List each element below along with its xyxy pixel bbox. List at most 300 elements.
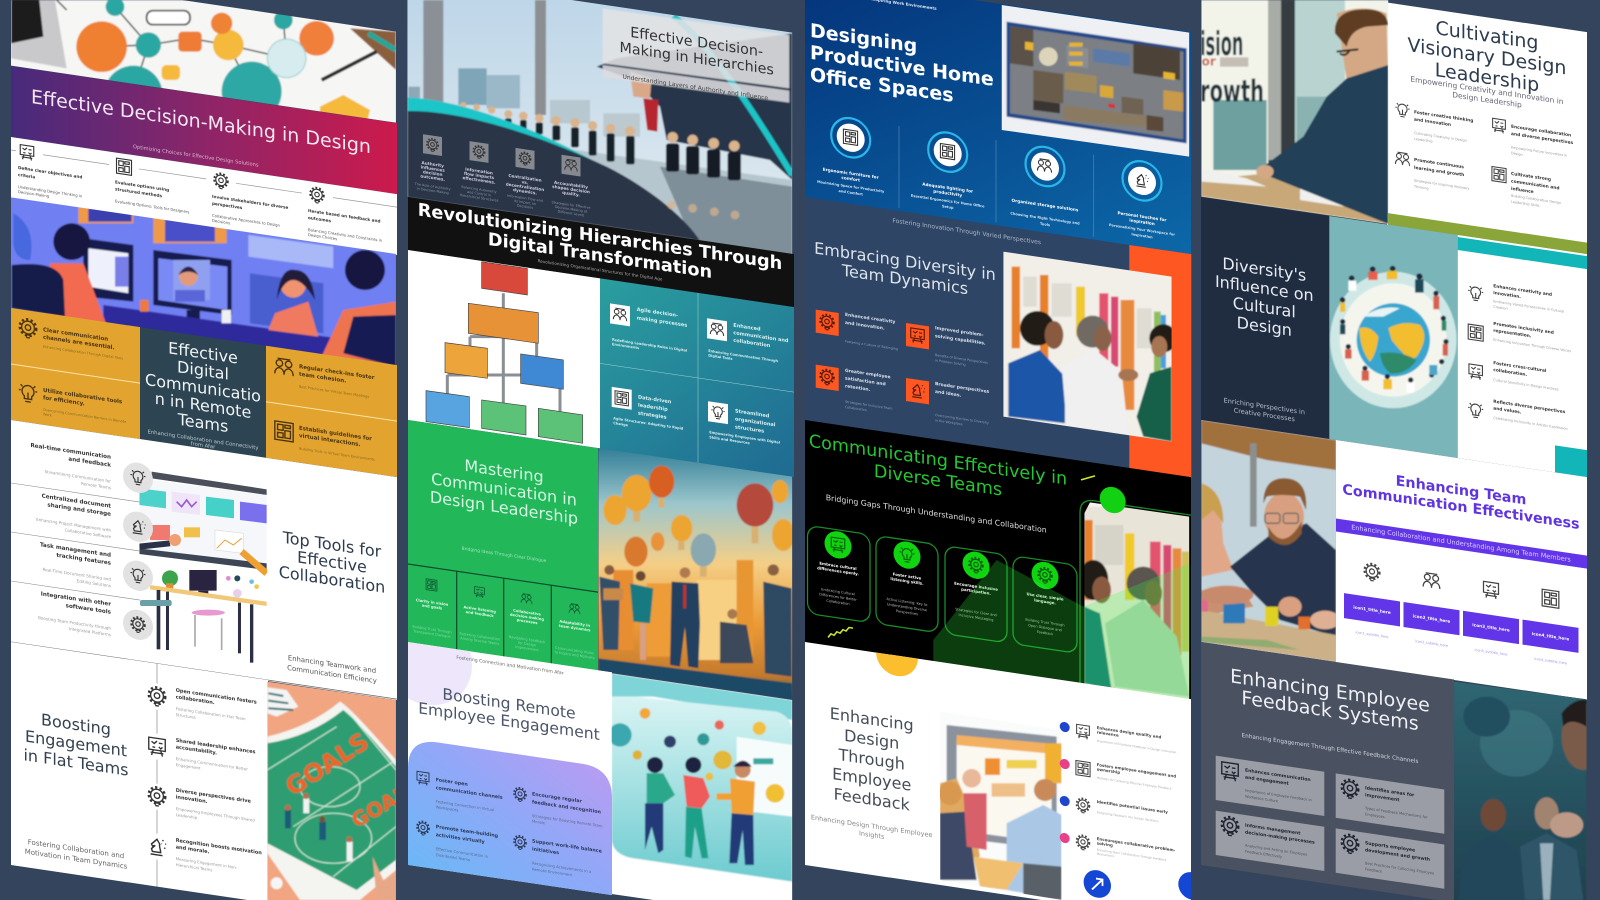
- item: reflects perspectives: Reflects diverse perspectives: [1493, 400, 1565, 415]
- item: streamlined structures: [708, 401, 780, 450]
- item: satisfaction: Strategies for Inclusive Team: [845, 400, 892, 411]
- slide content: flat teams: [23, 644, 262, 900]
- card: development and growth: [1336, 828, 1444, 889]
- item: collaborative tools: for efficiency.: [43, 395, 85, 407]
- card: development and growth: Feedback: [1365, 867, 1383, 874]
- card: development and growth: development and growth: [1365, 847, 1430, 863]
- icon: ring and plant: [1122, 158, 1162, 203]
- item: open communication: [146, 682, 257, 729]
- card: active listening: listening skills.: [890, 576, 924, 586]
- heading: Design: [844, 726, 899, 753]
- heading: Employee: [832, 764, 911, 795]
- item: open communication: Fostering Collaboration in Flat Team: [176, 706, 246, 721]
- card: embrace differences: Embrace cultural: [819, 561, 857, 571]
- item: authority: in Decision-Making: [417, 187, 449, 195]
- slide content: employee feedback: [811, 621, 1206, 900]
- item: task management: Real-Time Document Sharing and: [43, 567, 111, 582]
- slide content: digital transformation: [418, 200, 794, 477]
- item: problem solving: in Problem-Solving: [935, 358, 966, 367]
- icon: blue circle at edge: [1178, 870, 1206, 900]
- heading: Top Tools for: [283, 528, 381, 561]
- icon: board: [906, 323, 929, 349]
- item: check-ins: team cohesion.: [299, 372, 346, 385]
- item: data-driven: Agile Structures: Adapting to Rapid: [613, 416, 683, 431]
- item: satisfaction: retention.: [845, 383, 871, 393]
- image: team at wall: [1078, 500, 1193, 700]
- item: shared leadership: [146, 732, 255, 779]
- decoration: dash: [1081, 474, 1095, 482]
- item: adequate lighting: [911, 127, 985, 215]
- card: areas for improvement: Types of Feedback Mechanisms for: [1365, 806, 1427, 820]
- item: open communication: collaboration.: [176, 694, 215, 706]
- heading: Designing: [810, 19, 917, 58]
- image: blurred executives: [1453, 680, 1600, 900]
- icon: gears: [1222, 816, 1238, 837]
- item: icon 1: icon1_title_here: [1353, 605, 1391, 615]
- item: authority: influences: [421, 164, 445, 173]
- heading: Design Leadership: [430, 487, 578, 528]
- item: team building: Effective Communication in: [436, 846, 488, 859]
- item: recognition: Recognition boosts motivation: [176, 838, 262, 856]
- item: open channels: Workspaces: [436, 804, 458, 813]
- slide background: [1336, 440, 1587, 700]
- item: creativity: Fostering a Culture of Belonging: [845, 339, 898, 351]
- item: streamlined structures: Empowering Employees with Digital: [709, 430, 780, 445]
- item: define objectives: criteria: [18, 172, 35, 180]
- slide content: team communication: [1336, 465, 1587, 669]
- slide: Enhancing Employee Feedback Systems: [1201, 642, 1600, 900]
- item: check-ins: Regular check-ins foster: [299, 364, 374, 381]
- icon: gears: [514, 835, 526, 850]
- item: icon 1: icon1_subtitle_here: [1356, 630, 1388, 639]
- item: document sharing: sharing and storage: [47, 502, 111, 518]
- image: lightbulb balloons and leaders: [597, 447, 797, 707]
- subheading: Enhancing Engagement Through Effective Feedback Channels: [1242, 733, 1418, 765]
- slide background: [1387, 3, 1587, 255]
- item: design quality: Importance of Employee Feedback in Design Innovation: [1097, 739, 1176, 754]
- item: iterate: Design Choices: [308, 232, 337, 241]
- panel: center title: [140, 327, 266, 458]
- item: agile decision-making: [610, 303, 687, 357]
- icon: gear on green circle: [962, 550, 990, 581]
- icon: gear bulb: [417, 821, 429, 836]
- image: executive placing figures: [400, 0, 800, 263]
- card: clear language: Feedback: [1037, 630, 1054, 636]
- slide content: diverse teams: [808, 431, 1191, 700]
- image: team at planning wall: [1000, 247, 1177, 447]
- card: development and growth: Best Practices for Collecting Employee: [1365, 861, 1434, 876]
- image: video call illustration: [0, 193, 400, 370]
- item: collaboration: Encourage collaboration: [1511, 125, 1571, 139]
- item: collaborative decisions: for Design: [518, 641, 536, 647]
- slide: Effective Decision-Making in Design: [0, 0, 400, 255]
- item: storage: [1010, 142, 1080, 232]
- heading: Productive Home: [810, 41, 994, 91]
- item: clarity: Transparent Dialogue: [412, 629, 451, 639]
- item: team building: activities virtually: [436, 832, 485, 845]
- card: inclusive participation: participation.: [961, 587, 991, 596]
- card: communication and engagement: Workplace Culture: [1245, 795, 1279, 803]
- icon: board: [417, 771, 429, 786]
- icon: cloche: [1492, 166, 1506, 183]
- slide: Enhancing Design Through Employee Feedback: [805, 621, 1206, 900]
- slide: Revolutionizing Hierarchies Through Digital Transformation: [408, 197, 794, 477]
- slide background: [1201, 642, 1454, 900]
- item: enhanced communication: Enhancing Communication Through: [708, 349, 778, 363]
- subheading: Creative Processes: [1234, 406, 1295, 423]
- icon: building: [1468, 324, 1483, 341]
- slide content: hierarchies: [414, 0, 774, 246]
- item: collaboration: Empowering Future Innovators in: [1511, 145, 1567, 158]
- item: creativity: and innovation.: [845, 320, 885, 332]
- item: work-life balance: Recognizing Achievements in a: [532, 860, 591, 874]
- heading: Enhancing: [830, 704, 914, 735]
- item: document sharing: Enhancing Project Management with: [36, 517, 111, 533]
- item: centralization: Information Flow and: [507, 194, 543, 203]
- icon: bulb: [708, 401, 728, 424]
- icon: blue arrow button: [1084, 868, 1111, 900]
- heading: Mastering: [464, 456, 544, 486]
- item: shared leadership: Enhancing Communication for Better: [176, 756, 248, 772]
- icon: webcam: [19, 384, 37, 403]
- image: goals tablet: GOAL!: [347, 777, 420, 833]
- icon: brain hand: [1468, 286, 1483, 302]
- item: icon 4: icon4_title_here: [1532, 631, 1569, 642]
- subheading: Fostering Innovation Through Varied Perspectives: [892, 217, 1041, 246]
- item: communication and influence: communication and: [1511, 178, 1560, 192]
- item: listening: and feedback: [466, 610, 494, 618]
- item: accountability: shapes decision: [552, 184, 590, 194]
- item: listening: Active listening: [463, 605, 496, 614]
- item: cross-cultural: Fosters cross-cultural: [1493, 361, 1546, 374]
- chart: org chart illustration: [426, 262, 583, 443]
- item: centralization: Decisions: [517, 204, 533, 210]
- icon: gears: [1342, 779, 1358, 799]
- title band: [11, 66, 397, 194]
- card: active listening: Understanding Diverse: [887, 602, 927, 612]
- item: creativity: Enhances creativity and: [1493, 284, 1552, 298]
- icon: network: [20, 318, 36, 339]
- item: work-life balance: initiatives: [532, 846, 559, 856]
- card: embrace differences: [808, 525, 870, 623]
- card: embrace differences: Embracing Cultural: [821, 587, 855, 596]
- item: define objectives: [18, 144, 83, 204]
- item: communication and influence: influence: [1511, 186, 1534, 195]
- item: team building: Distributed Teams: [436, 852, 470, 862]
- item: listening: Among Diverse Teams: [460, 636, 499, 646]
- heading: Effective: [297, 547, 367, 577]
- slide background: [11, 642, 268, 900]
- icon: gear bulb: [131, 616, 145, 633]
- panel: green: [408, 420, 598, 671]
- item: streamlined structures: Streamlined: [735, 408, 769, 419]
- card: embrace differences: Collaboration: [826, 599, 850, 606]
- item: diverse perspectives: Empowering Employees Through Shared: [176, 806, 255, 823]
- item: accountability: [552, 153, 590, 218]
- item: creativity: [816, 308, 898, 351]
- card: active listening: Perspectives: [896, 609, 918, 616]
- icon: gear: [470, 141, 488, 163]
- card: clear language: language.: [1034, 597, 1056, 606]
- heading: Communicating Effectively in: [809, 432, 1067, 490]
- icon: gear: [149, 786, 165, 807]
- item: reflects perspectives: [1468, 395, 1568, 431]
- item: shared leadership: Shared leadership enhances: [176, 738, 255, 755]
- card: communication and engagement: Importance of Employee Feedback in: [1245, 789, 1312, 802]
- card: clear language: Use clear, simple: [1027, 591, 1063, 602]
- slide background: [805, 197, 1191, 478]
- item: broader perspectives: and ideas.: [935, 389, 961, 399]
- item: data-driven: [612, 387, 684, 436]
- item: creativity: [1468, 280, 1564, 319]
- icon: bulb: [130, 568, 146, 584]
- subheading: Fostering Connection and Motivation from Afar: [456, 655, 564, 677]
- item: adaptability: Communicating Vision: [555, 646, 594, 656]
- heading: Cultural: [1233, 293, 1296, 322]
- icon: knight: [133, 520, 146, 535]
- item: problem solving: Benefits of Diverse Perspectives: [935, 353, 988, 365]
- card: active listening: [876, 536, 938, 633]
- item: satisfaction: satisfaction and: [845, 376, 886, 388]
- item: satisfaction: Collaboration: [845, 405, 867, 412]
- image: watercolor team at board: [938, 710, 1063, 900]
- heading: Design: [1237, 313, 1292, 340]
- item: employee engagement: Methods for Collecting Effective Employee Feedback: [1097, 776, 1172, 791]
- heading: Making in Hierarchies: [620, 40, 774, 79]
- item: enhanced communication: [707, 318, 789, 369]
- slide: Cultivating Visionary Design Leadership: [1200, 0, 1587, 255]
- item: reflects perspectives: and values.: [1493, 405, 1522, 416]
- subheading: from Afar: [191, 441, 216, 451]
- slide content: feedback systems: [1216, 662, 1444, 889]
- icon: gear: [1077, 798, 1089, 814]
- heading: Leadership: [1435, 58, 1539, 96]
- item: ergonomic furniture: and Comfort: [839, 189, 863, 197]
- icon: gears: [516, 148, 534, 170]
- icon: gear: [816, 310, 839, 336]
- icon: tools: [1469, 364, 1482, 380]
- item: involve stakeholders: Decisions: [212, 218, 230, 225]
- icon: knight: [906, 378, 929, 404]
- subheading: Revolutionizing Organizational Structures for the Digital Age: [538, 258, 663, 282]
- item: adaptability: [555, 601, 595, 660]
- heading: Office Spaces: [810, 63, 954, 107]
- item: enhanced communication: collaboration: [733, 338, 771, 349]
- item: creative thinking: [1395, 103, 1473, 150]
- item: authority: The Role of Authority: [415, 182, 451, 191]
- subheading: Design Leadership: [1452, 90, 1522, 109]
- item: icon 2: icon2_subtitle_here: [1415, 639, 1448, 648]
- item: listening: [459, 584, 500, 646]
- item: agile decision-making: Environments: [612, 342, 639, 350]
- item: creative thinking: and innovation: [1414, 117, 1451, 128]
- item: work-life balance: Remote Environment: [532, 866, 573, 877]
- image: goals tablet: [263, 677, 420, 900]
- item: collaborative problem solving: Mechanisms: [1097, 852, 1115, 858]
- item: open communication: Open communication fosters: [176, 688, 257, 706]
- item: recognition: Measuring Engagement in Non-: [176, 856, 237, 870]
- item: regular feedback: Encourage regular: [532, 792, 582, 805]
- card: communication and engagement: and engagement: [1245, 775, 1290, 787]
- item: accountability: Decision-Making at: [555, 205, 588, 214]
- card: communication and engagement: Enhances communication: [1245, 769, 1311, 783]
- item: creative thinking: Cultivating Creativity in Design: [1414, 131, 1467, 143]
- card: clear language: [1013, 556, 1077, 653]
- item: check-ins: [275, 358, 375, 400]
- heading: Enhancing Team: [1396, 473, 1526, 509]
- card: active listening: Foster active: [893, 571, 921, 581]
- heading: Revolutionizing Hierarchies Through: [418, 200, 782, 274]
- item: information flow: [460, 140, 499, 203]
- heading: in Flat Teams: [23, 745, 129, 780]
- card: areas for improvement: [1336, 773, 1444, 834]
- icon: ring and tools: [1026, 144, 1064, 189]
- item: agile decision-making: making processes: [637, 315, 687, 329]
- item: continuous learning: [1395, 152, 1469, 197]
- item: real-time communication: Real-time communication: [31, 443, 111, 461]
- image: floor plan: [1000, 0, 1200, 160]
- heading: Communication in: [431, 469, 577, 510]
- slide: Mastering Communication in Design Leadership: [408, 420, 797, 707]
- card: management decisions: Analyzing and Acting on Employee: [1245, 844, 1307, 857]
- item: iterate: Balancing Creativity and Constraints in: [308, 227, 382, 243]
- item: ergonomic furniture: comfort: [841, 175, 860, 183]
- item: streamlined structures: organizational: [735, 416, 776, 428]
- decoration: green dot: [1100, 485, 1126, 515]
- item: regular feedback: Morale: [532, 818, 546, 825]
- item: problem solving: [906, 321, 988, 370]
- item: continuous learning: Promote continuous: [1414, 158, 1464, 170]
- heading: Effective: [168, 338, 238, 368]
- image: dashboard and desk: [139, 472, 267, 663]
- item: guidelines: [275, 421, 375, 462]
- item: clear channels: [20, 318, 123, 361]
- item: icon 2: icon2_title_here: [1413, 613, 1450, 624]
- item: collaborative decisions: Navigating Feedback: [509, 635, 545, 644]
- item: design quality: [1060, 720, 1176, 754]
- item: involve stakeholders: Involve stakeholders for diverse: [212, 194, 288, 210]
- item: integration: Integration with other: [41, 591, 111, 608]
- image: team handshake illustration: [608, 670, 797, 900]
- band: [1336, 518, 1587, 569]
- heading: Digital Transformation: [488, 229, 712, 283]
- item: icon 2: [1404, 569, 1460, 650]
- item: regular feedback: feedback and recognition: [532, 799, 601, 816]
- item: storage: Tools: [1040, 222, 1050, 227]
- item: authority: outcomes.: [420, 173, 445, 182]
- item: potential issues: Integrating Feedback into Design Iterations: [1097, 810, 1159, 823]
- item: accountability: Different Levels: [558, 210, 585, 218]
- subheading: Enriching Perspectives in: [1224, 396, 1305, 416]
- heading: Digital: [177, 357, 229, 384]
- icon: gear: [423, 134, 442, 156]
- item: icon 3: icon3_subtitle_here: [1475, 648, 1507, 657]
- item: guidelines: virtual interactions.: [299, 433, 361, 448]
- item: clarity: and goals: [422, 604, 443, 611]
- item: authority: decision: [423, 169, 442, 177]
- item: document sharing: Collaborative Software: [65, 527, 111, 539]
- item: personal touches: Inspiration: [1131, 232, 1153, 240]
- item: adequate lighting: Adequate lighting for: [922, 181, 973, 194]
- item: shared leadership: Engagement: [176, 762, 201, 771]
- icon: ring and gear: [831, 115, 870, 160]
- item: collaborative tools: Utilize collaborative tools: [43, 388, 122, 405]
- item: open channels: Foster open: [436, 778, 468, 788]
- item: evaluate options: structured methods: [115, 186, 162, 198]
- icon: grid: [116, 158, 132, 175]
- item: information flow: Balancing Autonomy: [461, 185, 497, 194]
- item: clear channels: Enhancing Collaboration Through Digital Tools: [43, 345, 123, 361]
- heading: Boosting Remote: [442, 684, 576, 723]
- item: diverse perspectives: Leadership: [176, 812, 198, 820]
- item: reflects perspectives: Celebrating Inclusivity in Artistic Expression: [1493, 416, 1568, 431]
- item: collaboration: and diverse perspectives: [1511, 131, 1573, 146]
- panel: right orange: [266, 346, 397, 477]
- item: check-ins: Best Practices for Virtual Team Meetings: [299, 385, 369, 399]
- item: potential issues: Identifies potential issues early: [1097, 799, 1168, 815]
- item: task management: [40, 542, 153, 595]
- item: iterate: Iterate based on feedback and: [308, 208, 381, 224]
- icon: team: [562, 155, 580, 177]
- icon: handshake: [1395, 152, 1410, 166]
- item: information flow: Information: [465, 166, 493, 176]
- item: ergonomic furniture: [817, 113, 885, 200]
- item: problem solving: Improved problem-: [935, 326, 983, 338]
- item: open channels: communication channels: [436, 785, 503, 801]
- subheading: Optimizing Choices for Effective Design Solutions: [133, 144, 259, 169]
- subheading: Enhancing Design Through Employee: [811, 813, 932, 839]
- slide background: [11, 420, 397, 700]
- item: streamlined structures: Skills and Resources: [709, 435, 750, 445]
- item: communication and influence: [1492, 166, 1561, 211]
- heading: Collaboration: [279, 562, 385, 597]
- item: cross-cultural: Cultural Sensitivity in Design Practices: [1493, 378, 1559, 392]
- heading: Embracing Diversity in: [814, 238, 996, 284]
- icon: team: [521, 593, 532, 604]
- item: adequate lighting: Essential Ergonomics for Home Office: [911, 194, 984, 209]
- item: accountability: Accountability: [554, 180, 588, 190]
- item: agile decision-making: Redefining Leadership Roles in Digital: [612, 338, 687, 353]
- item: iterate: [308, 186, 382, 242]
- item: collaborative problem solving: Enhancing Team Collaboration through Feedback: [1097, 848, 1166, 862]
- item: accountability: quality.: [562, 190, 580, 197]
- item: broader perspectives: Broader perspectives: [935, 382, 989, 395]
- icon: grid: [426, 579, 437, 591]
- heading: n in Remote: [155, 389, 251, 422]
- item: recognition: Hierarchical Teams: [176, 862, 212, 872]
- item: integration: software tools: [66, 603, 112, 616]
- heading: Engagement: [25, 727, 127, 761]
- item: collaborative decisions: Collaborative: [513, 609, 541, 617]
- icon: gears: [514, 787, 526, 802]
- item: continuous learning: Strategies for Inspiring Visionary: [1414, 179, 1469, 191]
- item: define objectives: Understanding Design Thinking in: [18, 184, 82, 199]
- item: task management: Task management and: [40, 542, 111, 559]
- subheading: Enhancing Collaboration and Understanding Among Team Members: [1351, 523, 1571, 564]
- item: work-life balance: Support work-life balance: [532, 839, 602, 855]
- item: data-driven: Data-driven: [638, 395, 671, 405]
- icon: bulb on green circle: [894, 540, 920, 571]
- heading: Employee Engagement: [418, 698, 600, 744]
- item: enhanced communication: Digital Tools: [708, 353, 732, 361]
- item: centralization: [506, 146, 544, 212]
- card: management decisions: decision-making processes: [1245, 830, 1315, 846]
- slide content: visionary leadership: [1395, 10, 1573, 213]
- icon: gear bulb: [310, 187, 324, 204]
- overlay: green translucent shape: [933, 560, 1189, 699]
- card: management decisions: Feedback Effectively: [1245, 850, 1283, 859]
- slide: Embracing Diversity in Team Dynamics: [805, 197, 1191, 478]
